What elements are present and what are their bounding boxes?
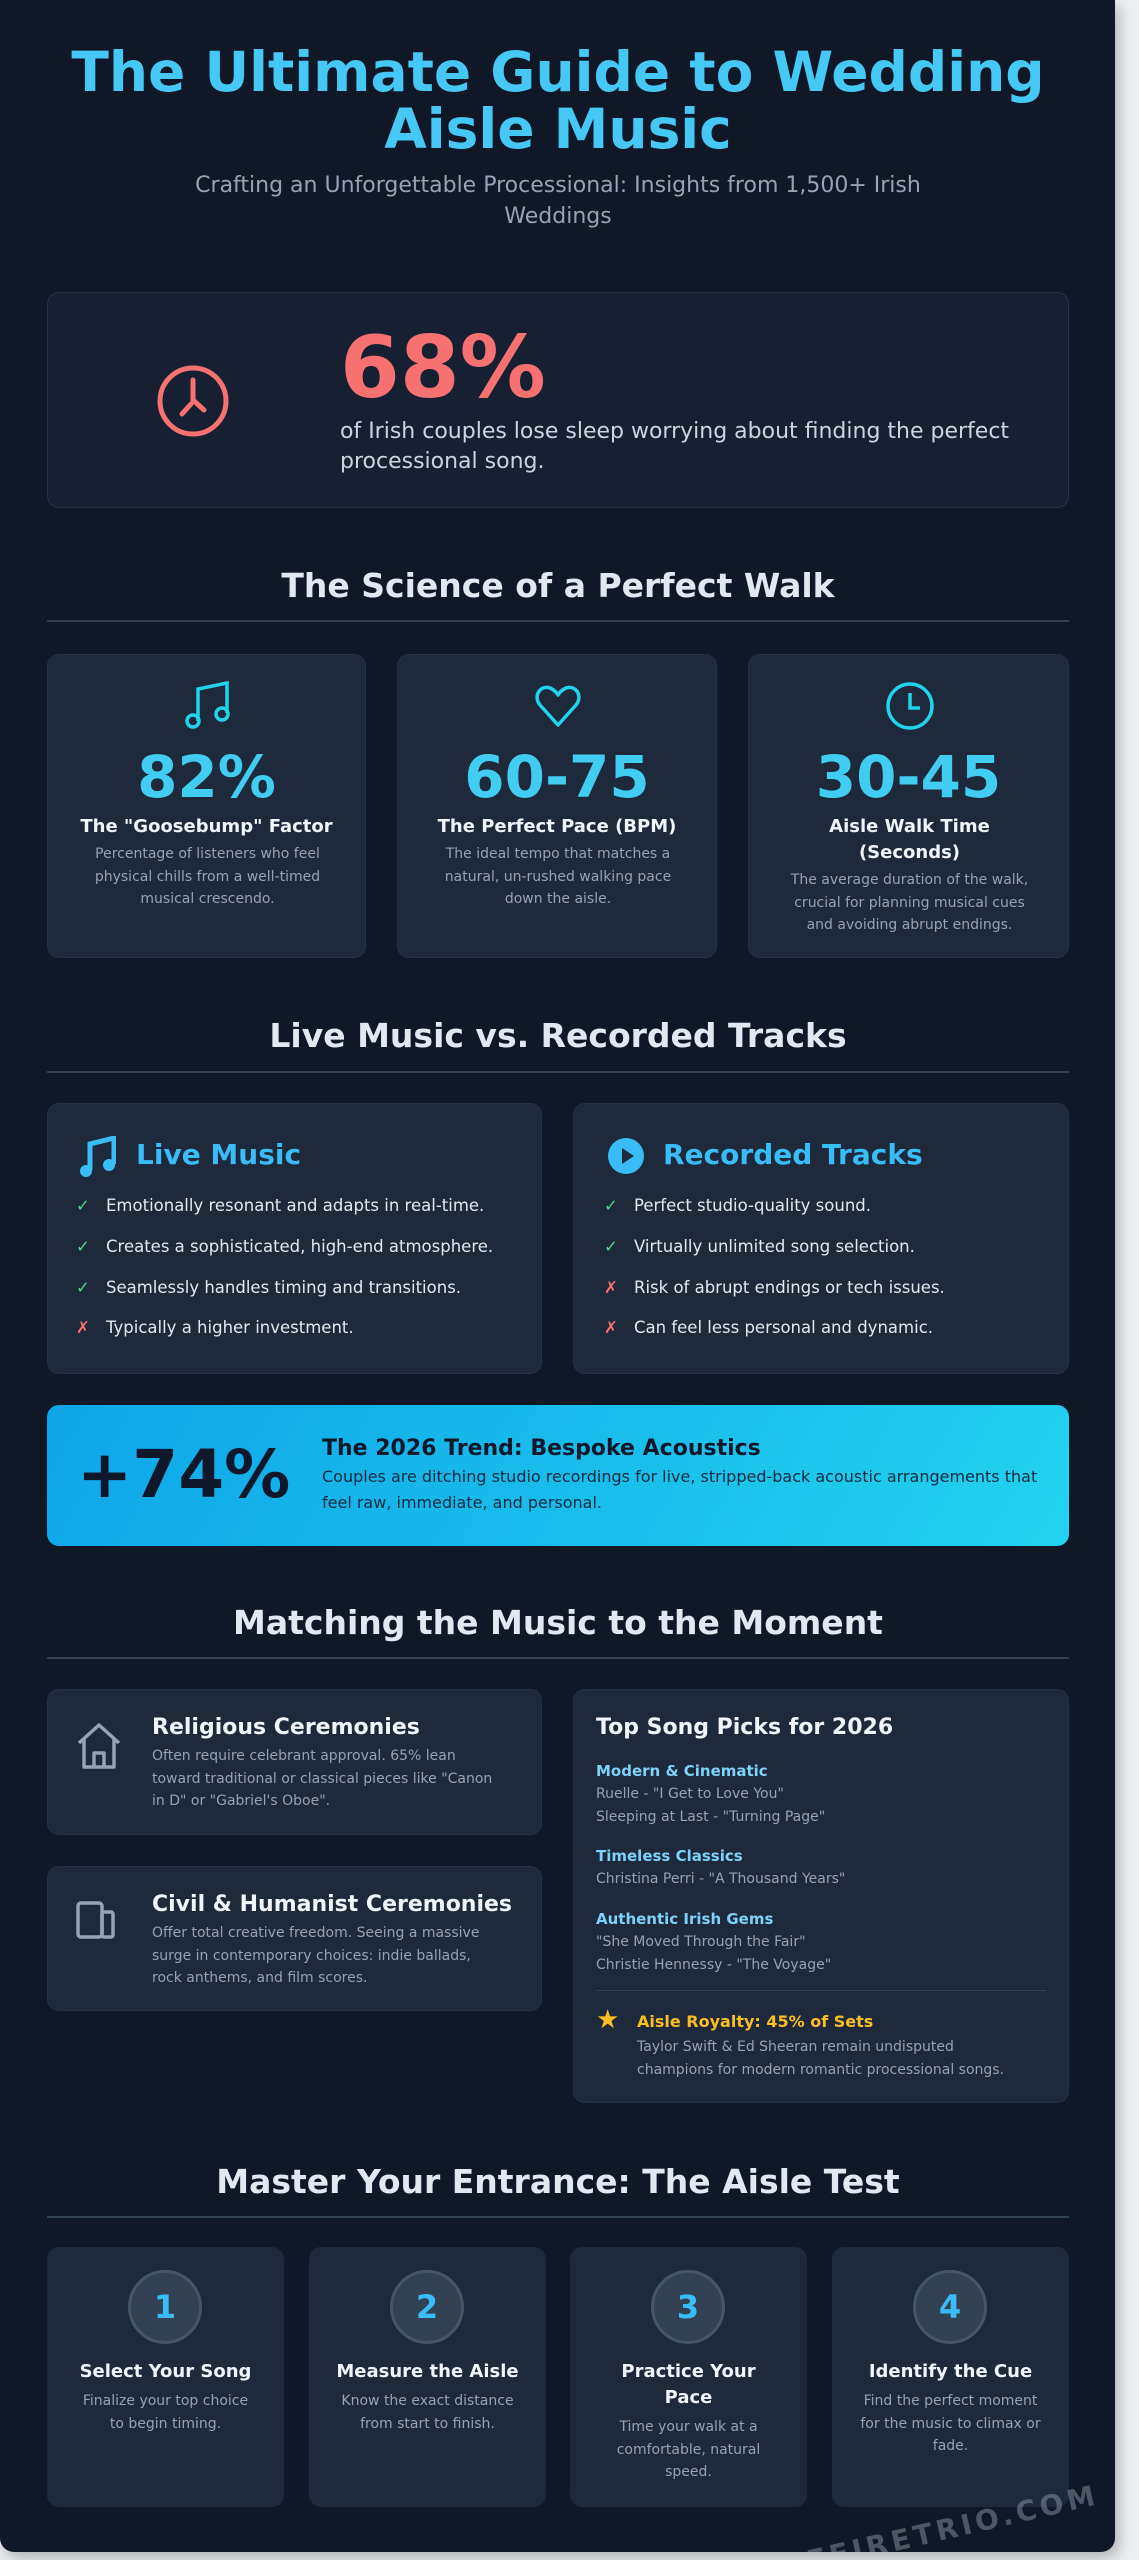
panel: civil: Offer total creative freedom. Seeing a massive surge in contemporary choices: indie ballads, rock anthems, and film scores. <box>152 1925 479 1986</box>
step 3 <box>570 2247 807 2507</box>
panel: pace <box>397 654 717 958</box>
step 1: Finalize your top choice to begin timing. <box>83 2393 248 2432</box>
panel: walk time: The average duration of the walk, crucial for planning musical cues and avoiding abrupt endings. <box>791 872 1028 933</box>
panel: recorded tracks: ✓ <box>604 1237 618 1256</box>
title: The Ultimate Guide to Wedding <box>71 40 1045 104</box>
step 4: Find the perfect moment for the music to climax or fade. <box>860 2393 1041 2454</box>
panel: top song picks: Top Song Picks for 2026 <box>596 1715 893 1740</box>
panel: recorded tracks: Perfect studio-quality sound. <box>634 1196 871 1215</box>
panel: recorded tracks: Recorded Tracks <box>663 1138 923 1171</box>
callout: 2026 trend <box>47 1405 1069 1546</box>
panel: walk time: Aisle Walk Time (Seconds) <box>829 816 990 863</box>
panel: goosebump: The "Goosebump" Factor <box>80 816 333 837</box>
step 2: 2 <box>416 2288 438 2326</box>
callout: 2026 trend: +74% <box>77 1436 290 1513</box>
callout: 2026 trend: The 2026 Trend: Bespoke Acoustics <box>322 1436 761 1461</box>
callout: aisle royalty: ★ <box>596 2005 619 2035</box>
panel: top song picks: Modern & Cinematic <box>596 1762 768 1780</box>
icon: clock <box>158 366 228 436</box>
callout: 2026 trend: Couples are ditching studio recordings for live, stripped-back acoustic arrangements that feel raw, immediate, and personal. <box>322 1467 1037 1512</box>
panel: pace: The Perfect Pace (BPM) <box>438 816 676 837</box>
panel: live music <box>47 1103 542 1374</box>
panel: religious <box>47 1689 542 1835</box>
panel: goosebump: 82% <box>137 743 276 811</box>
title <box>71 40 1045 161</box>
panel: 68% stat <box>47 292 1069 508</box>
panel: goosebump: Percentage of listeners who feel physical chills from a well-timed musical crescendo. <box>95 846 320 907</box>
panel: pace: The ideal tempo that matches a natural, un-rushed walking pace down the aisle. <box>445 846 671 907</box>
heading: aisle test: Master Your Entrance: The Aisle Test <box>216 2162 900 2201</box>
panel: walk time: 30-45 <box>816 743 1001 811</box>
callout: aisle royalty: Aisle Royalty: 45% of Sets <box>637 2012 873 2031</box>
step 4: Identify the Cue <box>869 2361 1032 2382</box>
callout: aisle royalty <box>596 2005 1004 2078</box>
panel: goosebump <box>47 654 366 958</box>
step 3: Time your walk at a comfortable, natural speed. <box>617 2419 760 2480</box>
panel: live music: ✓ <box>76 1278 90 1297</box>
step 4: 4 <box>939 2288 961 2326</box>
icon: house <box>78 1723 120 1769</box>
icon: music note filled <box>80 1136 116 1177</box>
step 3: Practice Your Pace <box>621 2361 756 2408</box>
icon: clock <box>886 682 934 730</box>
panel: recorded tracks: Virtually unlimited song selection. <box>634 1237 915 1256</box>
step 2 <box>309 2247 546 2507</box>
heading: live vs recorded: Live Music vs. Recorded Tracks <box>269 1016 847 1055</box>
icon: play <box>608 1138 644 1174</box>
panel: recorded tracks: ✗ <box>604 1278 618 1297</box>
step 2: Know the exact distance from start to finish. <box>341 2393 514 2432</box>
panel: civil: Civil & Humanist Ceremonies <box>152 1892 512 1917</box>
panel: top song picks: Authentic Irish Gems <box>596 1910 773 1928</box>
panel: top song picks: Ruelle - "I Get to Love You" <box>596 1786 784 1802</box>
panel: top song picks <box>573 1689 1069 2103</box>
panel: recorded tracks: Risk of abrupt endings or tech issues. <box>634 1278 945 1297</box>
panel: religious: Religious Ceremonies <box>152 1715 420 1740</box>
step 1 <box>47 2247 284 2507</box>
panel: recorded tracks: ✗ <box>604 1318 618 1337</box>
icon: music note <box>185 681 230 729</box>
panel: live music: Typically a higher investment. <box>106 1318 354 1337</box>
heading: matching: Matching the Music to the Moment <box>233 1603 883 1642</box>
icon: heart <box>535 686 581 727</box>
panel: top song picks: Christie Hennessy - "The Voyage" <box>596 1956 831 1972</box>
panel: walk time <box>748 654 1069 958</box>
stat text: of Irish couples lose sleep worrying about finding the perfect processional song. <box>340 419 1009 474</box>
panel: live music: ✗ <box>76 1318 90 1337</box>
panel: recorded tracks: ✓ <box>604 1196 618 1215</box>
big number: 68% <box>340 318 546 418</box>
step 1: Select Your Song <box>80 2361 251 2382</box>
panel: recorded tracks <box>573 1103 1069 1374</box>
panel: recorded tracks: Can feel less personal and dynamic. <box>634 1318 933 1337</box>
step 2: Measure the Aisle <box>336 2361 519 2382</box>
panel: live music: Emotionally resonant and adapts in real-time. <box>106 1196 484 1215</box>
panel: live music: Seamlessly handles timing and transitions. <box>106 1278 461 1297</box>
panel: religious: Often require celebrant approval. 65% lean toward traditional or classical pieces like "Canon in D" or "Gabriel's Oboe". <box>152 1748 492 1809</box>
panel: top song picks: Christina Perri - "A Thousand Years" <box>596 1871 845 1887</box>
panel: civil <box>47 1866 542 2011</box>
panel: top song picks: Timeless Classics <box>596 1847 743 1865</box>
panel: pace: 60-75 <box>464 743 650 811</box>
callout: aisle royalty: Taylor Swift & Ed Sheeran remain undisputed champions for modern romantic processional songs. <box>637 2039 1004 2078</box>
icon: devices <box>76 1901 115 1939</box>
step 3: 3 <box>677 2288 699 2326</box>
heading: science: The Science of a Perfect Walk <box>281 566 835 605</box>
panel: live music: Creates a sophisticated, high-end atmosphere. <box>106 1237 493 1256</box>
panel: live music: ✓ <box>76 1237 90 1256</box>
step 4 <box>832 2247 1069 2507</box>
panel: top song picks: "She Moved Through the Fair" <box>596 1934 806 1950</box>
step 1: 1 <box>154 2288 176 2326</box>
subtitle: Crafting an Unforgettable Processional: Insights from 1,500+ Irish Weddings <box>195 173 921 229</box>
panel: live music: ✓ <box>76 1196 90 1215</box>
panel: live music: Live Music <box>136 1138 301 1171</box>
panel: top song picks: Sleeping at Last - "Turning Page" <box>596 1808 825 1824</box>
title: Aisle Music <box>384 97 732 161</box>
